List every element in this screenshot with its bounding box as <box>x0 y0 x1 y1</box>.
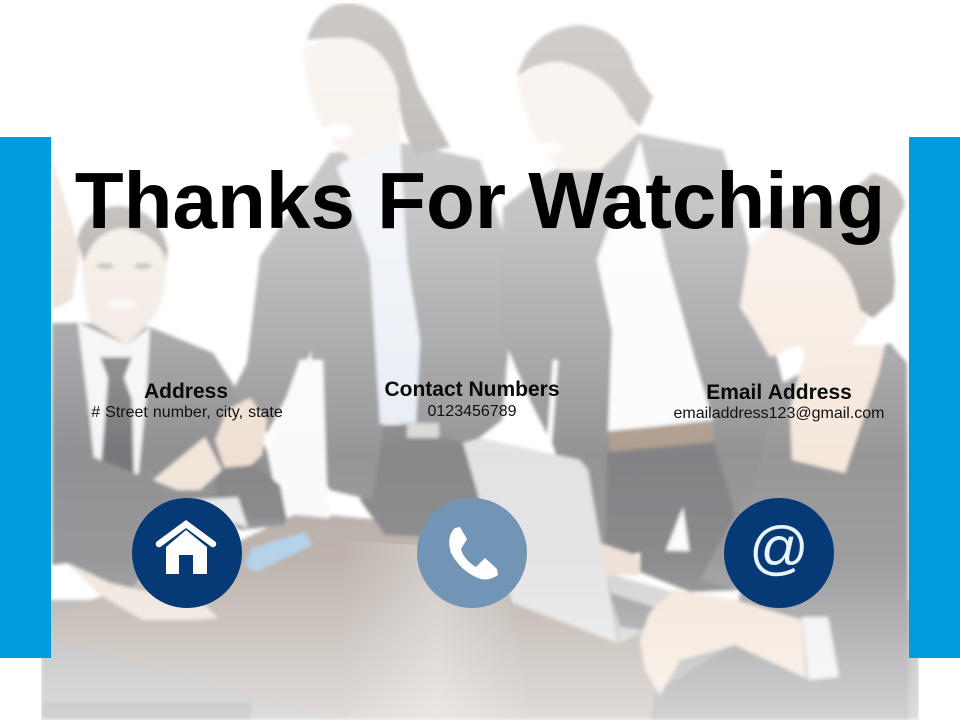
white triangle between legs <box>665 507 690 555</box>
seated woman hair <box>755 173 905 318</box>
icon: at sign: @ <box>749 515 809 581</box>
icon: phone <box>417 498 527 608</box>
seated woman face <box>740 222 868 370</box>
slit between women <box>546 360 558 455</box>
woman one hair <box>307 3 450 155</box>
woman two neck and face <box>517 61 637 170</box>
text block: email address: emailaddress123@gmail.com <box>674 405 884 422</box>
title: Thanks For Watching <box>75 156 885 245</box>
text block: contact numbers <box>384 378 560 420</box>
text block: address <box>91 380 283 421</box>
bottom strip under table <box>41 600 919 720</box>
seated woman hands and cuff <box>640 590 806 695</box>
icon: at sign <box>724 498 834 608</box>
woman one jacket and arm <box>233 143 510 500</box>
seated woman skin chest <box>790 345 885 473</box>
foreground dark sleeve <box>52 435 200 590</box>
foreground arm <box>153 437 222 490</box>
woman two shirt <box>597 140 713 432</box>
text block: email address: Email Address <box>706 381 852 404</box>
woman two trousers <box>605 442 737 566</box>
left man hair <box>77 206 168 262</box>
icon: home <box>132 498 242 608</box>
woman one shirt <box>337 140 420 424</box>
hand on laptop <box>600 543 640 575</box>
dark band behind laptop <box>640 550 740 592</box>
woman one neck and face <box>303 39 400 167</box>
table highlight <box>340 540 530 720</box>
left man neck and face <box>82 224 167 345</box>
foreground hand <box>67 563 218 620</box>
woman two hair <box>517 25 653 127</box>
left man tie <box>100 357 134 480</box>
far left person sliver <box>52 160 80 310</box>
text block: address: Address <box>144 380 228 403</box>
laptop lid <box>463 438 618 643</box>
seated woman jacket <box>650 343 909 720</box>
woman one trousers <box>360 425 500 540</box>
text block: contact numbers: Contact Numbers <box>384 378 560 401</box>
text block: address: # Street number, city, state <box>91 404 283 421</box>
left man suit <box>52 323 285 530</box>
text block: contact numbers: 0123456789 <box>428 403 516 420</box>
white gap beside arm <box>267 360 330 518</box>
laptop base <box>607 573 677 643</box>
belt buckle <box>407 423 439 438</box>
right blue bar <box>909 137 960 658</box>
text block: email address <box>674 381 884 422</box>
woman two belt <box>608 421 714 455</box>
left blue bar <box>0 137 51 658</box>
table <box>56 512 690 720</box>
left man shirt <box>78 323 150 490</box>
woman two jacket <box>500 133 783 565</box>
man's sleeve under handshake <box>215 465 287 520</box>
cuff and blue marker <box>190 497 248 528</box>
foreground handshake hands <box>215 398 267 475</box>
